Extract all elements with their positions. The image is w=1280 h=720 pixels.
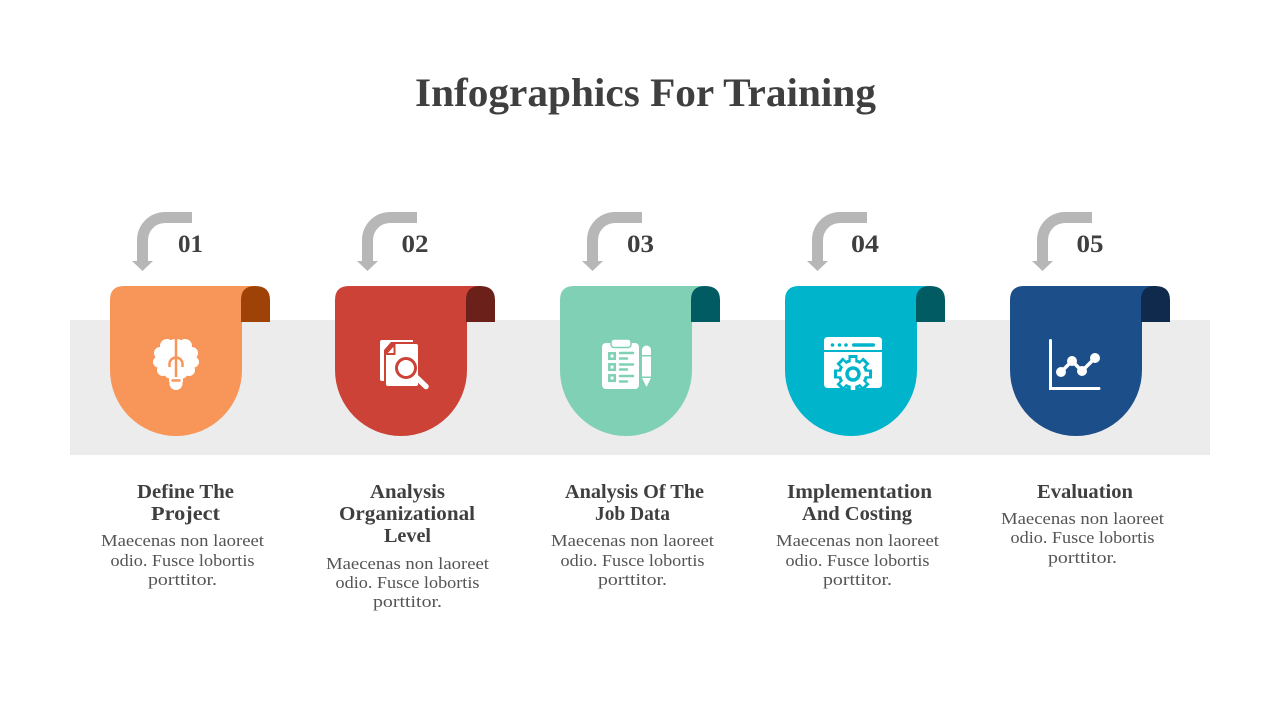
step 5 description: odio. Fusce lobortis (1010, 528, 1154, 547)
step 3 title: Job Data (595, 503, 670, 525)
card 1 (110, 286, 270, 436)
arrow 3 (582, 212, 642, 271)
card 4 (785, 286, 945, 436)
step 4 title: And Costing (802, 503, 913, 525)
step 1 description: odio. Fusce lobortis (110, 551, 254, 570)
step 3 title (565, 481, 704, 525)
step 2 title: Analysis (370, 481, 445, 503)
arrow 5 (1032, 212, 1092, 271)
arrow 1 (132, 212, 192, 271)
step 4 description: odio. Fusce lobortis (786, 551, 930, 570)
step 5 description (1001, 509, 1164, 567)
icon: line chart (1050, 340, 1100, 388)
step 2 description (326, 554, 489, 611)
number 03: 03 (627, 231, 654, 258)
step 5 description: Maecenas non laoreet (1001, 509, 1164, 528)
step 1 description: porttitor. (148, 570, 217, 589)
step 3 description: Maecenas non laoreet (551, 531, 714, 550)
icon: clipboard and pencil (602, 339, 651, 389)
step 1 title: Define The (137, 481, 234, 503)
icon: document search (380, 340, 426, 386)
step 3 description (551, 531, 714, 589)
step 4 title: Implementation (787, 481, 933, 503)
step 3 title: Analysis Of The (565, 481, 704, 503)
step 4 description: porttitor. (823, 570, 892, 589)
step 3 description: porttitor. (598, 570, 667, 589)
number 04: 04 (851, 231, 880, 258)
arrow 4 (807, 212, 867, 271)
number 01: 01 (178, 231, 203, 258)
step 2 title: Organizational (339, 503, 475, 525)
step 4 title (787, 481, 933, 525)
step 2 description: Maecenas non laoreet (326, 554, 489, 573)
step 4 description (776, 531, 939, 589)
arrow 2 (357, 212, 417, 271)
step 2 (326, 212, 495, 611)
step 2 title: Level (384, 525, 431, 547)
card 2 (335, 286, 495, 436)
step 1 description (101, 531, 264, 589)
step 5 title: Evaluation (1037, 481, 1134, 503)
step 2 description: odio. Fusce lobortis (336, 573, 480, 592)
step 4 (776, 212, 945, 589)
icon: browser window with gear (824, 337, 882, 393)
number 02: 02 (402, 231, 428, 258)
step 2 description: porttitor. (373, 592, 442, 611)
step 5 description: porttitor. (1048, 548, 1117, 567)
step 3 description: odio. Fusce lobortis (560, 551, 704, 570)
step 5 (1001, 212, 1170, 567)
step 2 title (339, 481, 475, 547)
step 1 description: Maecenas non laoreet (101, 531, 264, 550)
grey band (70, 320, 1210, 455)
step 1 (101, 212, 270, 589)
title: Infographics For Training (415, 70, 876, 115)
step 4 description: Maecenas non laoreet (776, 531, 939, 550)
card 3 (560, 286, 720, 436)
step 3 (551, 212, 720, 589)
step 1 title (137, 481, 234, 525)
number 05: 05 (1076, 231, 1104, 258)
card 5 (1010, 286, 1170, 436)
icon: brain bulb (153, 339, 199, 390)
step 1 title: Project (151, 503, 220, 525)
